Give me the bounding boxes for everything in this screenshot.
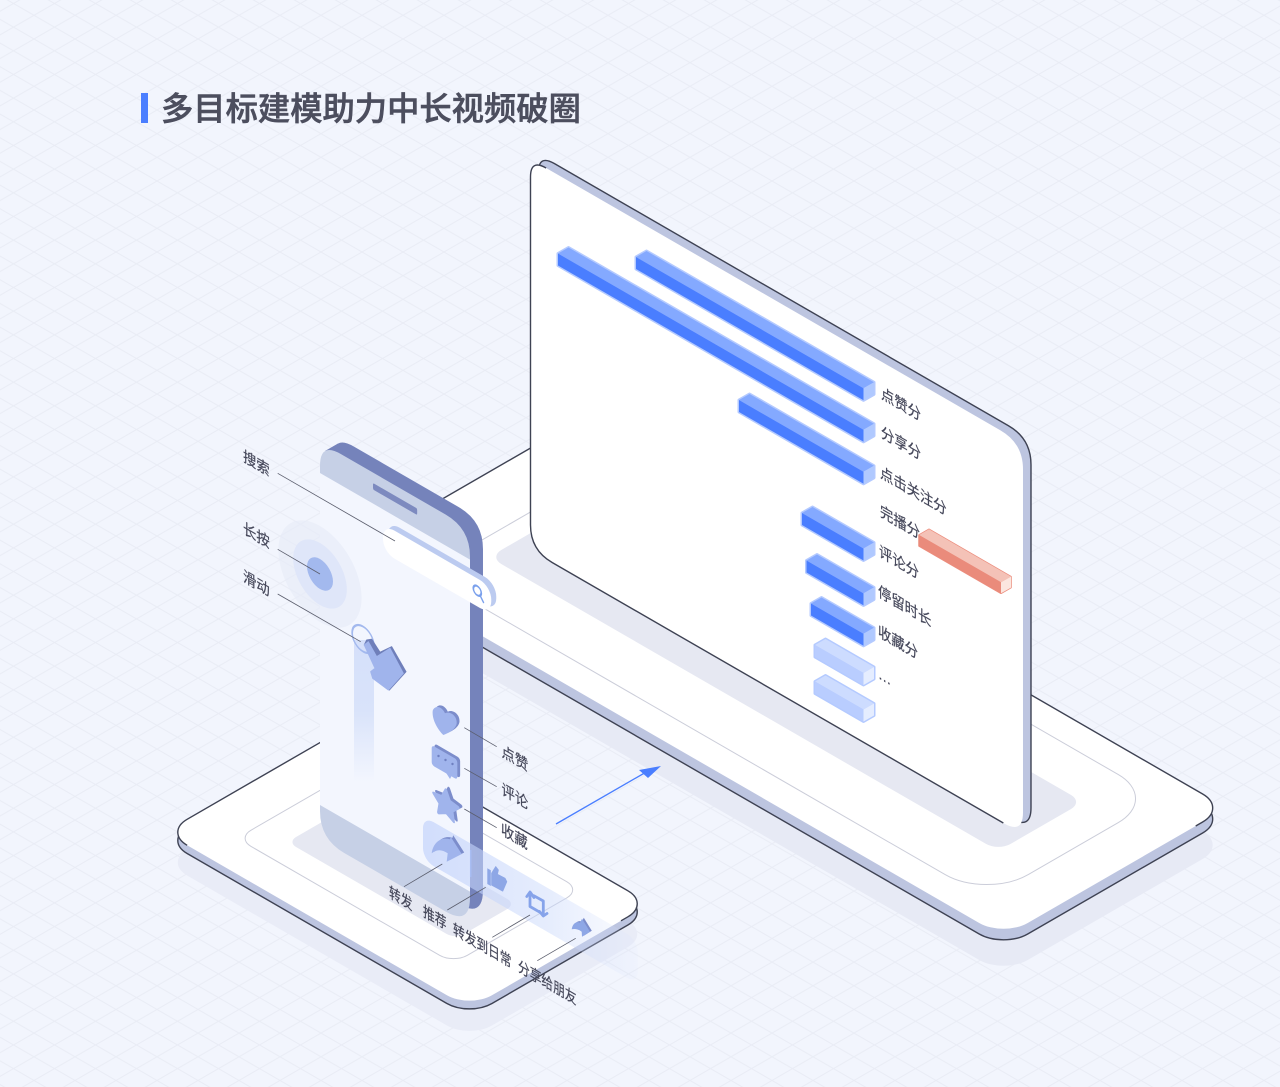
bar labels: 点赞分 [881,384,921,425]
swipe track [354,640,374,782]
panel: phone [278,434,638,984]
bar: 完播分 [802,507,874,560]
phone labels: 点赞 [502,742,528,775]
panel: ranking screen [530,154,1031,834]
large base platform [344,427,1227,974]
small base platform [165,728,650,1038]
icon: retweet [527,892,547,916]
bar: 评论分 [806,554,874,605]
icon: swipe hand [352,620,406,690]
phone front [320,442,470,926]
bar: highlighted red [919,529,1011,593]
phone labels: 搜索 [243,447,270,480]
icon: repost [432,835,464,862]
icon: heart [433,705,460,735]
phone corner bridge [325,444,352,462]
phone labels: 转发 [389,883,412,915]
phone labels [243,447,577,1009]
bar: 点击关注分 [739,394,874,484]
leader lines [278,473,576,961]
phone side [333,434,483,918]
bar labels: 点击关注分 [880,463,947,519]
bar: 停留时长 [811,598,874,646]
divider [470,850,472,877]
bar labels: … [878,665,891,690]
arrow [556,766,661,824]
bar: 分享分 [558,248,874,442]
phone labels: 分享给朋友 [518,957,577,1009]
bar labels: 停留时长 [878,582,931,631]
phone labels: 评论 [502,780,529,814]
phone labels: 转发到日常 [453,920,512,972]
search bar [383,521,496,614]
icon: comment [432,743,460,780]
bar labels: 完播分 [880,502,920,543]
icon: star [434,781,461,824]
bar labels: 评论分 [879,542,919,583]
bar labels [878,384,947,690]
icon: thumb up [487,867,507,891]
bar: 收藏分 [815,639,874,685]
phone labels: 收藏 [501,820,528,853]
bar: 点赞分 [636,251,874,400]
title: 多目标建模助力中长视频破圈 [161,91,581,127]
speaker slot [373,483,417,515]
long press ripples [278,502,362,646]
icon: share [572,918,592,937]
bar labels: 分享分 [881,423,921,464]
highlight panel [423,816,638,984]
phone screen [320,473,470,892]
phone labels: 推荐 [423,902,446,934]
bar: other [815,676,874,722]
bar labels: 收藏分 [878,622,918,663]
phone labels: 长按 [243,519,270,552]
phone labels: 滑动 [243,567,270,600]
